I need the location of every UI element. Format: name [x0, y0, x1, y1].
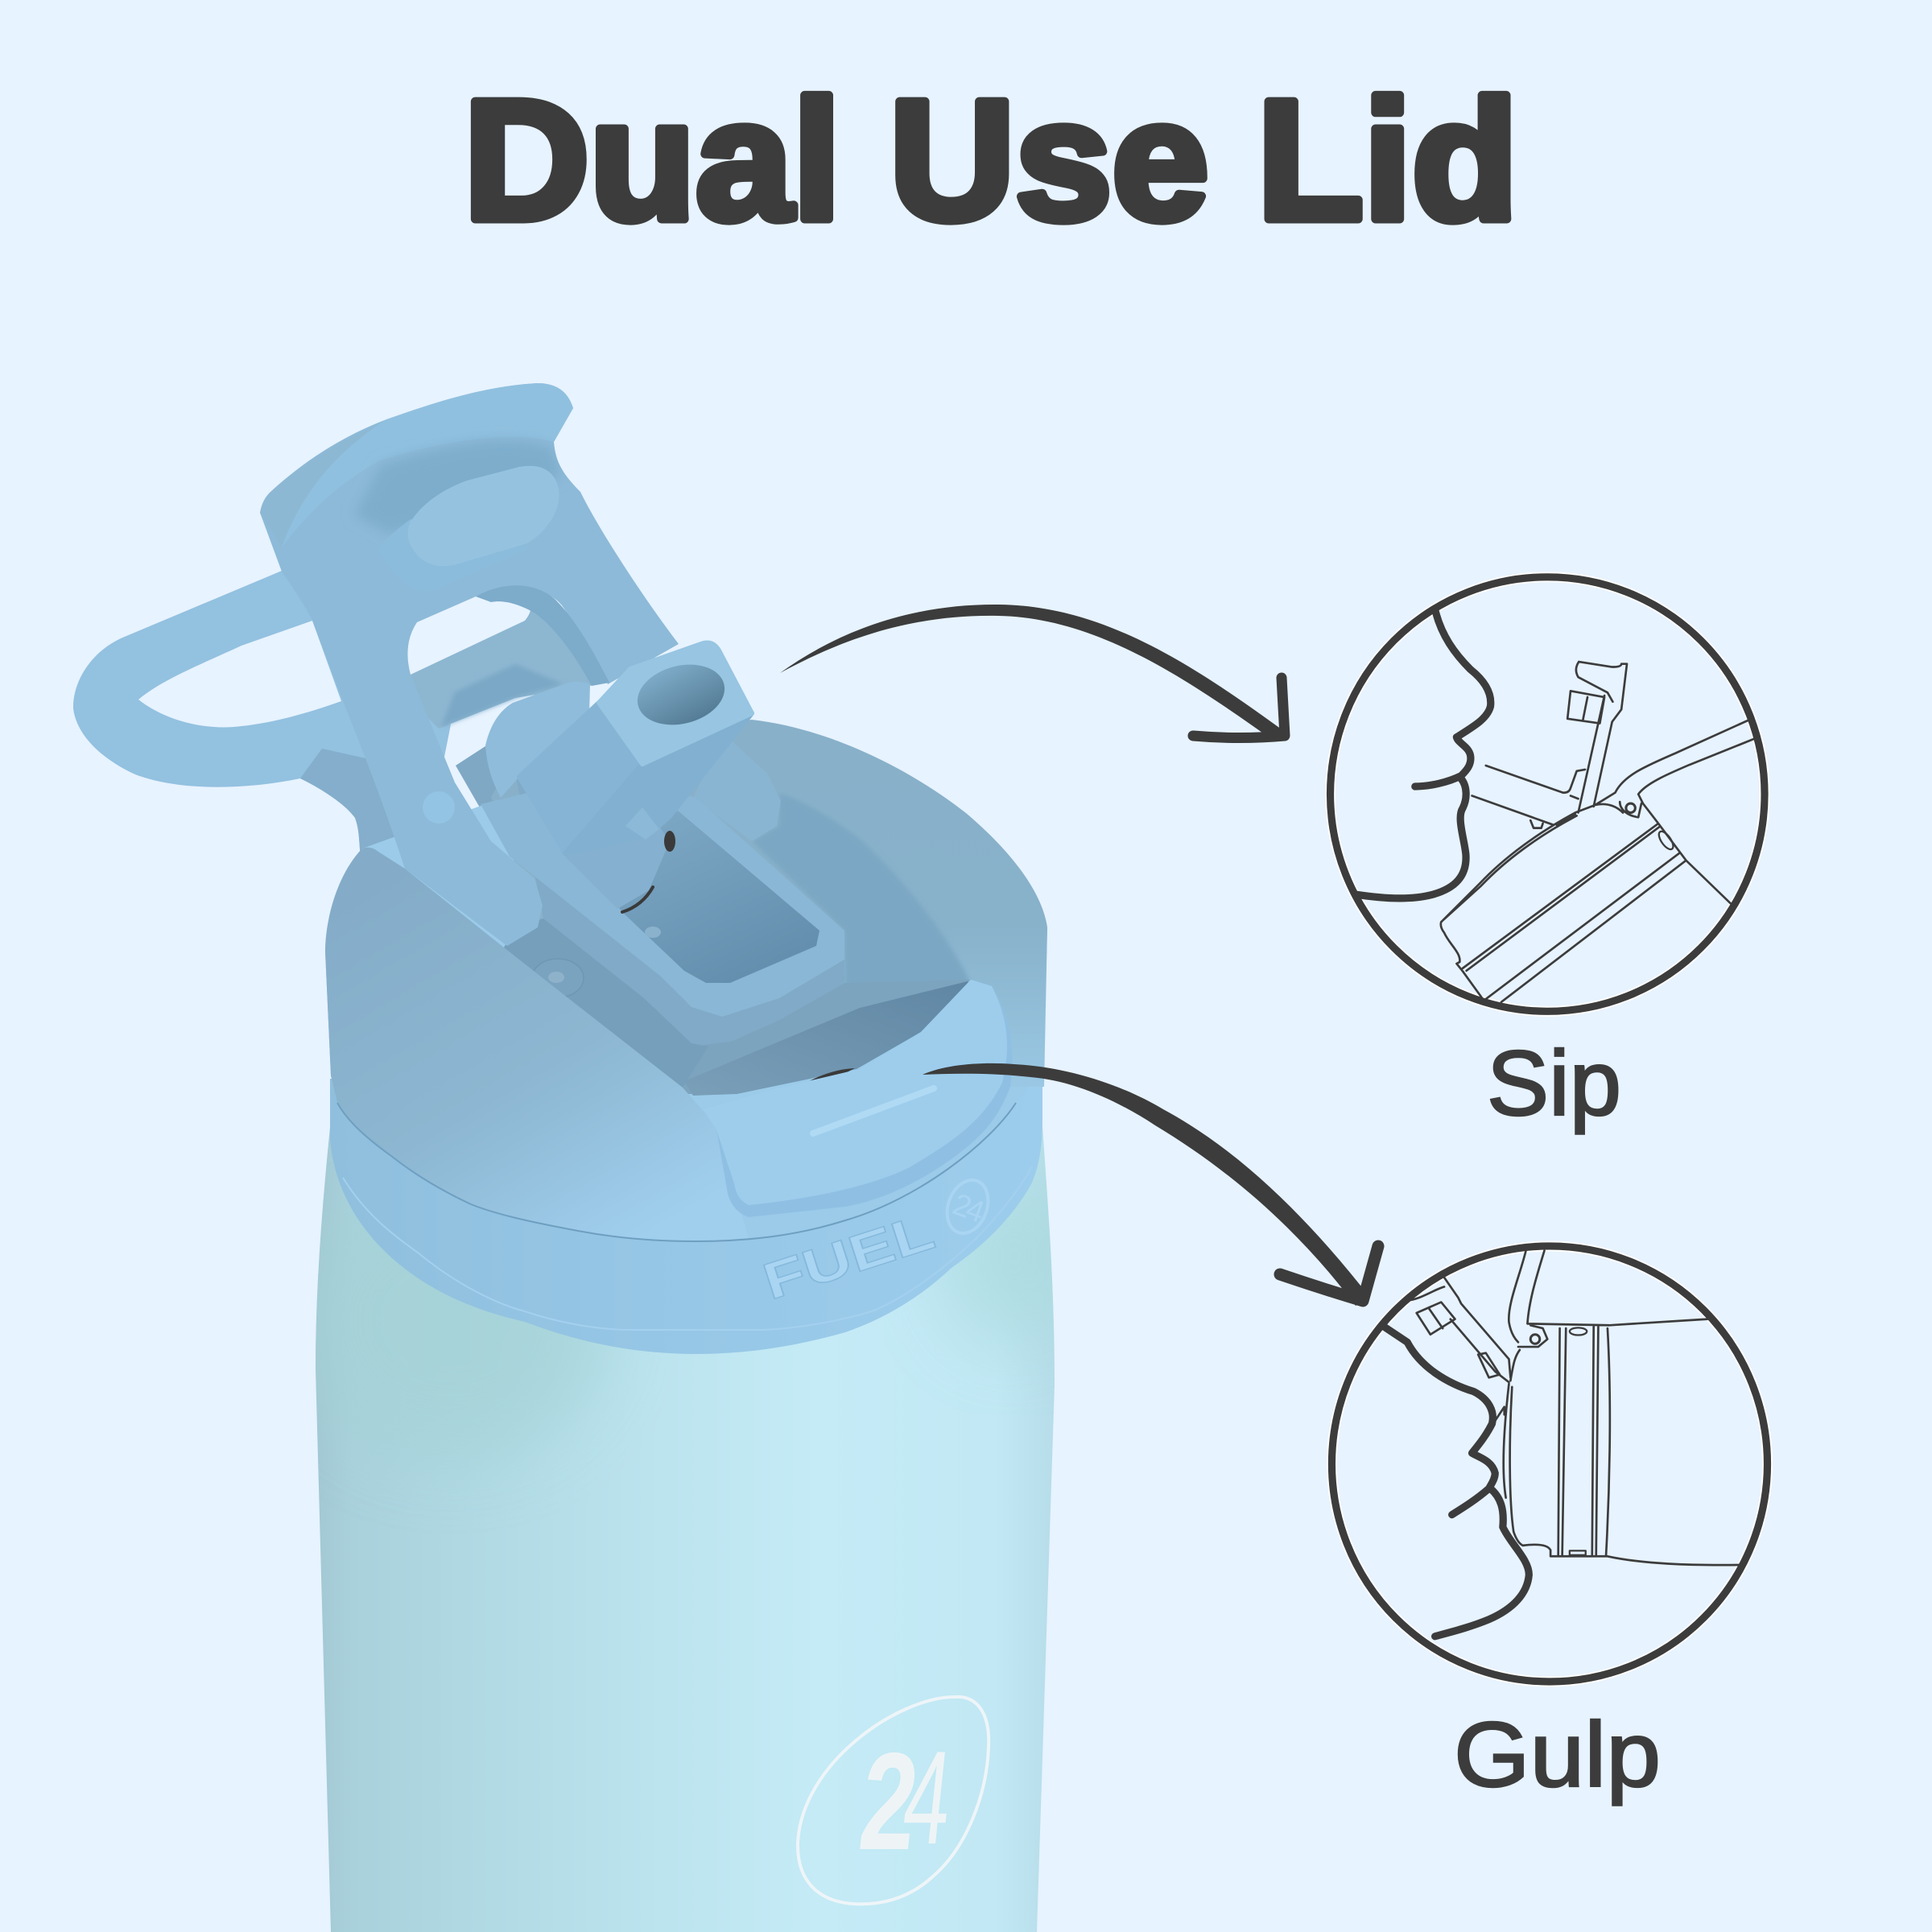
- sip circle: [1331, 577, 1765, 1011]
- dark seal: [622, 831, 675, 912]
- arm arch underside: [476, 585, 609, 686]
- bar inner shade: [441, 664, 564, 727]
- gulp illustration: [1331, 1246, 1768, 1682]
- gulp slit: [809, 1068, 855, 1081]
- lid top surface: [491, 720, 1047, 1095]
- arrow to sip: [780, 605, 1285, 741]
- right cylinder: [693, 733, 781, 841]
- gulp bottle line art: [1504, 1251, 1740, 1565]
- nozzle hole: [631, 656, 731, 733]
- hole screw: [645, 927, 661, 938]
- gulp label: Gulp: [1454, 1704, 1661, 1806]
- channel opening: [596, 811, 819, 983]
- channel rim top: [481, 773, 844, 1017]
- carry handle loop: [73, 571, 451, 886]
- trough recess: [752, 793, 970, 998]
- sip bottle line art: [1441, 720, 1754, 1002]
- ball joint: [564, 805, 670, 909]
- lip slot: [813, 1088, 934, 1133]
- gulp circle: [1331, 1246, 1768, 1682]
- nozzle top face: [599, 643, 752, 764]
- nozzle front face: [565, 713, 752, 853]
- channel rim side: [515, 773, 844, 1046]
- pad shade: [354, 440, 562, 535]
- front cover wedge: [325, 848, 749, 1241]
- button: [408, 466, 559, 566]
- rear plate: [456, 745, 515, 813]
- collar brand text: FUEL: [756, 1202, 941, 1311]
- gulp flip arm line art: [1407, 1278, 1510, 1421]
- arm top band: [282, 383, 573, 547]
- sip illustration: [1331, 577, 1765, 1011]
- arrow to gulp: [923, 1063, 1378, 1306]
- front lip outer: [703, 980, 1013, 1217]
- collar mini logo: 24: [948, 1187, 989, 1230]
- bottle with open lid: [73, 383, 1087, 1932]
- collar groove lines: [343, 1166, 1032, 1330]
- bottle logo: [798, 1697, 989, 1904]
- lid collar: [330, 1079, 1042, 1354]
- sip flip arm line art: [1472, 662, 1627, 828]
- flip arm: [260, 383, 679, 946]
- bottle logo: 2: [853, 1724, 925, 1879]
- button base: [378, 519, 531, 592]
- lid bottom groove: [337, 1103, 1016, 1241]
- bottle logo: 4: [897, 1724, 959, 1872]
- front lip inner: [703, 980, 1007, 1205]
- sip face: [1355, 609, 1491, 898]
- nozzle left face: [519, 703, 642, 853]
- collar mini logo: [940, 1174, 995, 1239]
- handle bars behind arm: [411, 600, 600, 729]
- bottle body: [316, 1127, 1055, 1932]
- front pit: [644, 980, 970, 1094]
- lid shell: [325, 805, 1047, 1241]
- arm back fold: [260, 423, 386, 547]
- handle opening: [138, 621, 341, 727]
- nozzle tab: [625, 807, 659, 840]
- nozzle dome: [485, 682, 590, 798]
- body top shading: [298, 1167, 1087, 1457]
- title: Dual Use Lid: [464, 64, 1518, 255]
- sip label: Sip: [1487, 1033, 1621, 1135]
- gulp face: [1384, 1327, 1529, 1637]
- floor with screw: [504, 919, 708, 1088]
- arm pivot stud: [423, 791, 455, 824]
- handle neck shade: [300, 749, 419, 886]
- gulp opening lens: [684, 981, 971, 1096]
